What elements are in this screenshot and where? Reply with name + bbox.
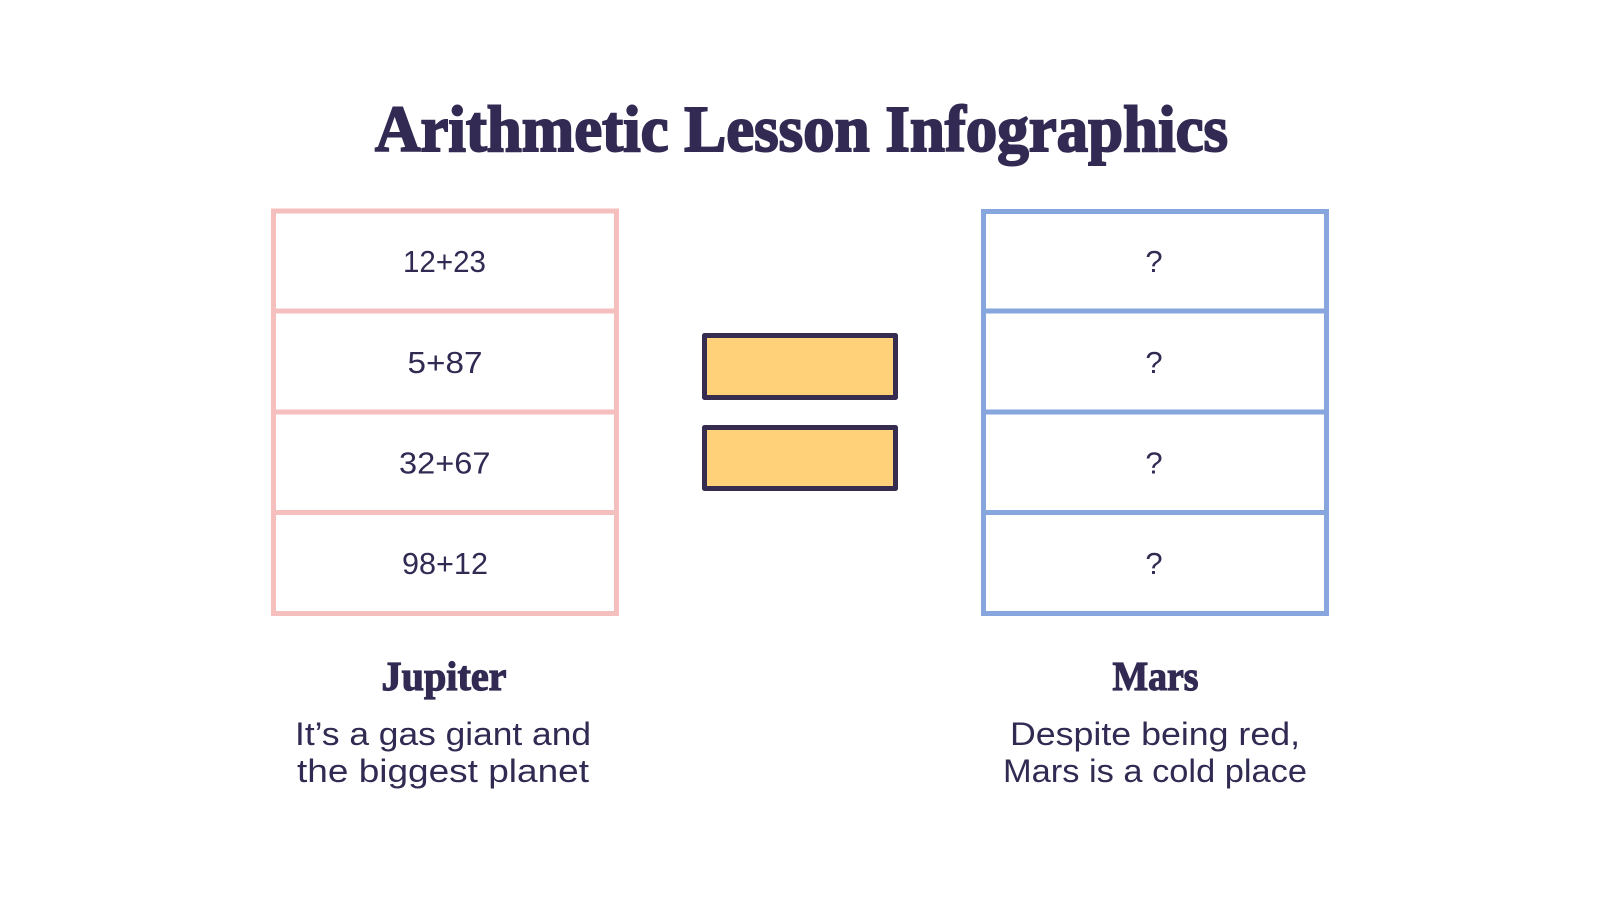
heading: Mars: Mars bbox=[1112, 653, 1198, 699]
description: Mars bbox=[1003, 716, 1307, 789]
panel: Jupiter sums table bbox=[274, 211, 616, 614]
answer placeholder 1: ? bbox=[1145, 244, 1163, 279]
title: Arithmetic Lesson Infographics bbox=[375, 93, 1228, 166]
panel: Mars answers table bbox=[984, 212, 1326, 614]
description: Mars: Despite being red, bbox=[1010, 716, 1300, 752]
description: Mars: Mars is a cold place bbox=[1003, 753, 1307, 789]
answer placeholder 2: ? bbox=[1145, 345, 1163, 380]
description: Jupiter: the biggest planet bbox=[297, 753, 589, 789]
text block: Jupiter bbox=[295, 653, 591, 789]
sum: 98+12: 98+12 bbox=[402, 546, 488, 581]
heading: Jupiter: Jupiter bbox=[382, 653, 506, 699]
description: Jupiter: It’s a gas giant and bbox=[295, 716, 591, 752]
description: Jupiter bbox=[295, 716, 591, 789]
sum: 5+87: 5+87 bbox=[408, 345, 482, 380]
icon: equals sign bbox=[704, 336, 896, 488]
sum: 32+67: 32+67 bbox=[399, 446, 490, 480]
text block: Mars bbox=[1003, 653, 1307, 789]
answer placeholder 4: ? bbox=[1145, 546, 1163, 581]
sum: 12+23: 12+23 bbox=[403, 244, 486, 279]
answer placeholder 3: ? bbox=[1145, 446, 1163, 480]
